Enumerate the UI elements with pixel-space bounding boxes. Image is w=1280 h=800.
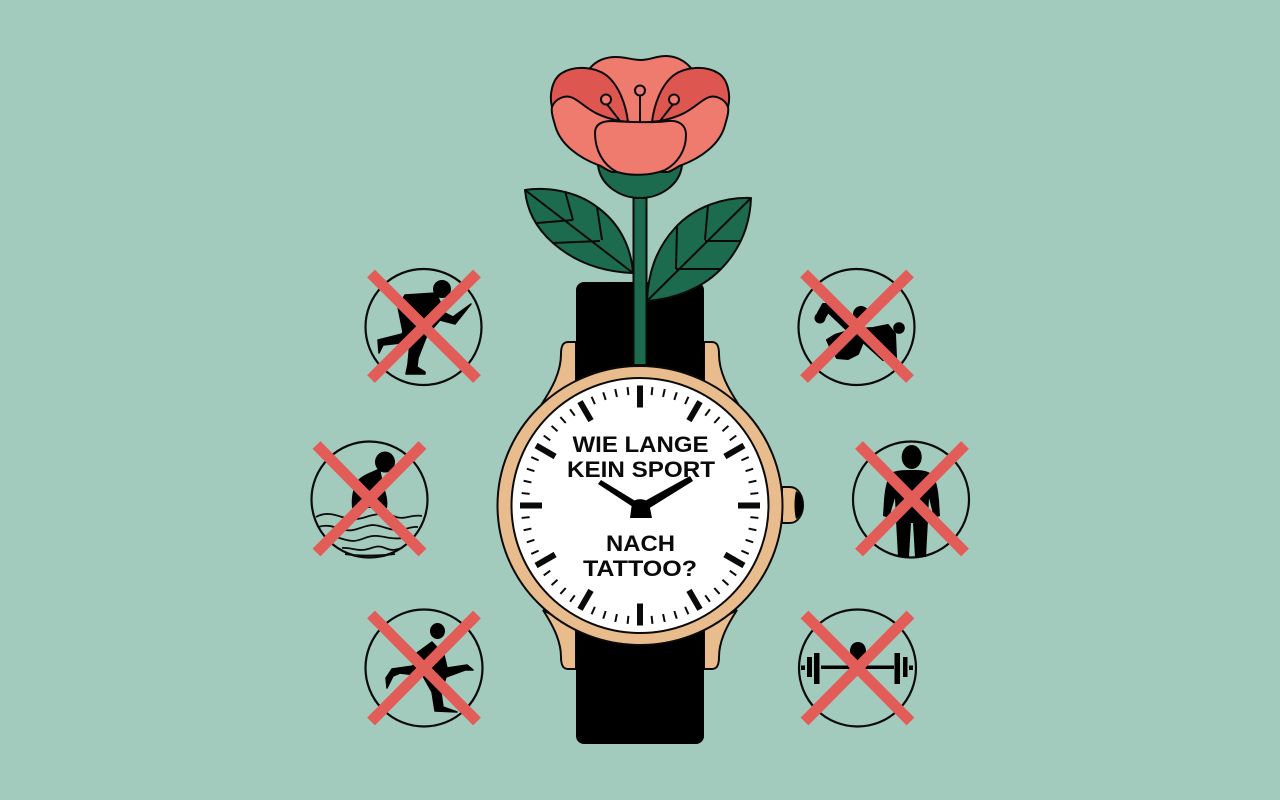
icon: no jumping run [366,610,482,726]
heading: watch text: WIE LANGE [572,432,708,457]
heading: watch text: KEIN SPORT [567,457,716,482]
icon: watch crown [782,487,803,523]
icon: no sit-ups [798,269,914,385]
flower stamens [601,86,679,122]
minute ticks [522,387,758,624]
icon: flower [525,56,751,365]
left dark petal [551,68,628,125]
icon: no running [366,269,482,385]
flower calyx [598,165,682,198]
icon: no swimming [312,442,428,558]
hour ticks [520,386,760,626]
back petal [590,56,691,125]
icon: no standing figure [853,442,969,558]
right large petal [640,97,728,172]
left large petal [552,97,640,172]
flower stem [634,198,646,365]
icon: no weightlifting [799,610,916,726]
watch dial [512,378,768,633]
right dark petal [652,68,729,125]
heading: watch text: NACH [606,531,675,556]
left leaf [525,189,633,273]
heading: watch text: TATTOO? [583,556,697,581]
front petal [595,121,686,175]
heading: watch text [567,432,716,581]
icon: watch hands [598,476,693,518]
right leaf [647,198,751,301]
icon: watch strap [576,282,704,744]
watch case [498,366,782,645]
icon: watch lugs [543,342,737,669]
